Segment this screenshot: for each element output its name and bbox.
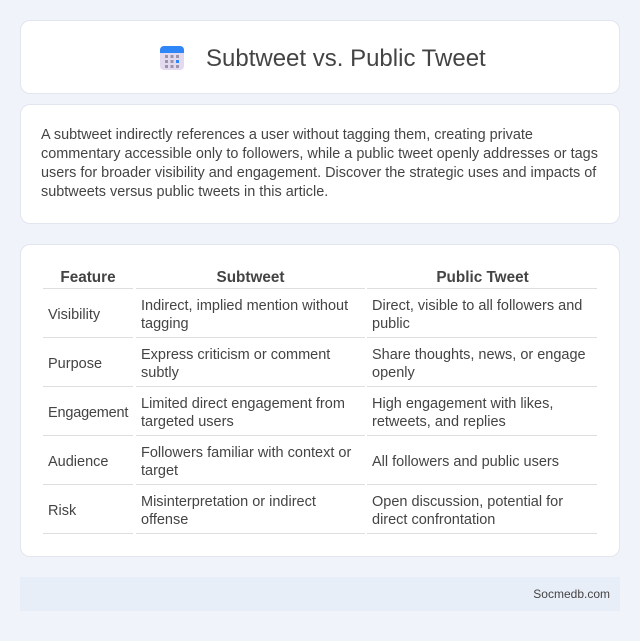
row: Purpose: Purpose <box>48 356 102 372</box>
icon: calendar <box>160 46 184 70</box>
row: Engagement: Limited direct engagement from <box>141 396 345 412</box>
row: Risk: offense <box>141 512 188 528</box>
panel: comparison table <box>20 244 620 557</box>
row: Visibility <box>48 298 582 332</box>
panel: title card <box>20 20 620 94</box>
row: Visibility: Indirect, implied mention without <box>141 298 348 314</box>
intro paragraph: commentary accessible only to followers, while a public tweet openly addresses or tags <box>41 146 598 162</box>
row: Risk: Open discussion, potential for <box>372 494 563 510</box>
intro paragraph: subtweets versus public tweets in this article. <box>41 184 328 200</box>
row: Risk: direct confrontation <box>372 512 495 528</box>
table header: Public Tweet <box>436 269 529 286</box>
row: Audience: Followers familiar with context or <box>141 445 351 461</box>
table header <box>60 269 529 286</box>
row: Visibility: Direct, visible to all followers and <box>372 298 582 314</box>
row: Purpose: subtly <box>141 365 179 381</box>
comparison table <box>43 269 597 534</box>
row: Visibility: public <box>372 316 410 332</box>
row: Risk: Misinterpretation or indirect <box>141 494 316 510</box>
row: Purpose: Share thoughts, news, or engage <box>372 347 586 363</box>
row: Purpose: Express criticism or comment <box>141 347 330 363</box>
table header: Subtweet <box>216 269 284 286</box>
row: Visibility: tagging <box>141 316 189 332</box>
intro paragraph <box>41 127 598 200</box>
row: Audience: target <box>141 463 178 479</box>
footer text: Socmedb.com <box>533 587 610 601</box>
intro paragraph: A subtweet indirectly references a user without tagging them, creating private <box>41 127 533 143</box>
row: Engagement: retweets, and replies <box>372 414 506 430</box>
row: Purpose <box>48 347 586 381</box>
row: Visibility: Visibility <box>48 307 100 323</box>
row: Audience: Audience <box>48 454 108 470</box>
row: Audience <box>48 445 559 479</box>
title: Subtweet vs. Public Tweet <box>206 45 486 72</box>
row: Risk: Risk <box>48 503 76 519</box>
row: Risk <box>48 494 563 528</box>
row: Audience: All followers and public users <box>372 454 559 470</box>
row: Purpose: openly <box>372 365 415 381</box>
row: Engagement <box>48 396 553 430</box>
intro paragraph: users for broader visibility and engagement. Discover the strategic uses and impacts of <box>41 165 596 181</box>
row: Engagement: targeted users <box>141 414 234 430</box>
panel: intro text <box>20 104 620 224</box>
footer bar <box>20 577 620 611</box>
table header: Feature <box>60 269 116 286</box>
row: Engagement: High engagement with likes, <box>372 396 553 412</box>
row: Engagement: Engagement <box>48 405 128 421</box>
